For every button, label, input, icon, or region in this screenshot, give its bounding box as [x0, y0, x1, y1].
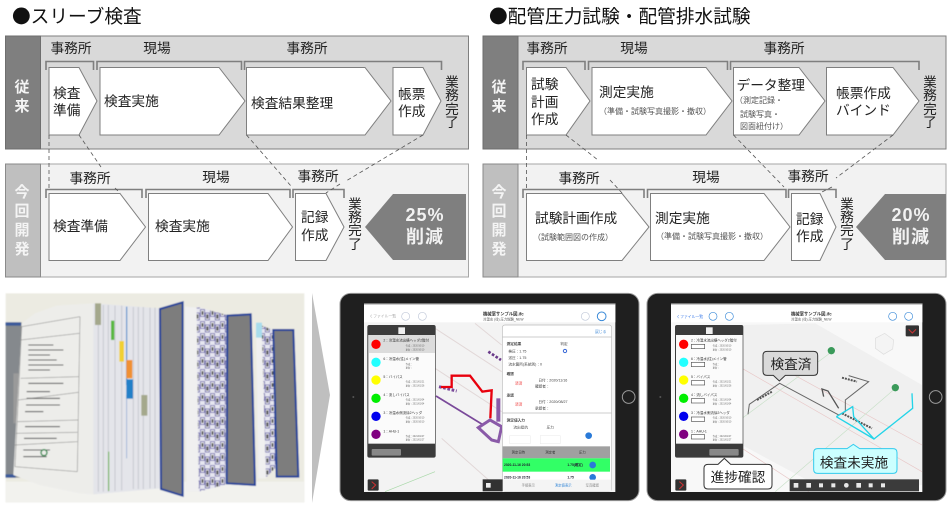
step: 検査結果整理: 検査結果整理: [251, 96, 333, 111]
row label: 今回開発: 回: [491, 203, 507, 220]
location brackets: 現場: [143, 41, 171, 56]
measurement detail panel: 確認者：: [535, 384, 550, 389]
location brackets: [46, 169, 344, 198]
system list panel: [367, 325, 436, 458]
system list panel: 作成：2020/10/10: [406, 344, 425, 348]
system list panel: 更新：2020/10/10: [406, 347, 425, 351]
measurement detail panel: 承認者：: [535, 405, 550, 410]
measurement detail panel: 測定値入力: [507, 418, 525, 423]
reduction arrow: 25%削減: [365, 194, 466, 260]
heading: スリーブ検査: ●スリーブ検査: [12, 2, 142, 29]
end label: 業務完了: 務: [445, 88, 459, 103]
system list panel: 更新：2021/01/27: [406, 438, 425, 442]
system list panel: 更新：2021/01/26: [406, 383, 425, 387]
measurement detail panel: 検圧：1.75: [508, 348, 526, 353]
system list panel: 6：冷温水(往)メイン管: [691, 356, 727, 361]
system list panel: 1：AHU-1: [691, 429, 707, 433]
system list panel: 更新：2021/01/27: [713, 438, 732, 442]
measurement detail panel: 1.75: [567, 476, 574, 480]
measurement detail panel: 圧力: [579, 450, 586, 455]
system list panel: 更新：: [713, 365, 720, 369]
step: 検査実施: [148, 194, 292, 260]
measurement detail panel: 2020-11-16 20:53: [504, 476, 530, 480]
measurement detail panel: [502, 325, 612, 492]
photo: paper inspection binders: [6, 293, 304, 502]
callout: 検査未実施: [814, 444, 897, 473]
system list panel: 2：冷温水流出横ヘッダ2階付: [383, 338, 430, 343]
step: 帳票作成バインド: 帳票作成: [836, 86, 891, 101]
panel: スリーブ検査 従来: [6, 36, 468, 149]
step: 検査実施: 検査実施: [104, 94, 159, 109]
screen contents: [364, 303, 615, 492]
step: データ整理: データ整理: [736, 77, 805, 93]
location brackets: 現場: [202, 170, 230, 185]
row label: 今回開発: 今: [14, 183, 30, 201]
reduction arrow: 20%削減: 削減: [892, 226, 930, 247]
arrow: before to after: [312, 293, 330, 503]
measurement detail panel: 日付：2020/11/16: [538, 378, 567, 383]
location brackets: 現場: [620, 41, 648, 56]
step: 検査準備: 準備: [53, 103, 81, 118]
top navigation bar: 冷温水 (往) 圧力試験_NEW: [483, 317, 524, 322]
system list panel: 作成：2020/10/10: [713, 416, 732, 420]
system list panel: 作成：2020/10/10: [713, 344, 732, 348]
row label: 従来: 来: [14, 98, 30, 115]
step: 測定実施: （準備・試験写真撮影・撤収）: [599, 106, 711, 116]
end label: 業務完了: 完: [923, 102, 937, 117]
step mapping dashed lines: left: [49, 135, 423, 193]
step: データ整理: 図面紐付け）: [740, 121, 788, 131]
measurement detail panel: 圧力: [547, 424, 554, 429]
step: 試験計画作成: 計画: [531, 95, 558, 110]
system list panel: 更新：: [406, 365, 413, 369]
step: 検査準備: [49, 68, 97, 135]
step: データ整理: [734, 68, 825, 135]
callout: 検査未実施: 検査未実施: [820, 455, 888, 470]
system list panel: 作成：2021/01/04: [713, 398, 732, 402]
row label: 従来: 来: [491, 98, 507, 115]
location brackets: 事務所: [69, 171, 111, 186]
end label: 業務完了: 業: [445, 75, 459, 90]
system list panel: 作成：2021/01/04: [406, 398, 425, 402]
measurement detail panel: 流水箇所(系統別)：0: [508, 362, 542, 367]
tablet: progress screen: [647, 293, 946, 501]
step: 記録作成: [296, 194, 344, 260]
end label: 業務完了: 了: [923, 115, 937, 130]
top navigation bar: 機械室サンプル図.ifc: [791, 311, 832, 318]
measurement detail panel: 手順表示: [522, 483, 536, 488]
end label: 業務完了: 務: [348, 210, 362, 225]
step: 試験計画作成: 試験: [531, 77, 559, 92]
location brackets: 事務所: [50, 41, 92, 56]
measurement detail panel: 流出抵抗: [513, 424, 528, 429]
system list panel: 作成：: [406, 362, 413, 366]
location brackets: 事務所: [558, 171, 600, 186]
heading: 配管圧力試験・配管排水試験: ●配管圧力試験・配管排水試験: [489, 2, 751, 29]
callout: 進捗確認: 進捗確認: [711, 470, 766, 485]
system list panel: 更新：2021/01/04: [713, 401, 732, 405]
location brackets: 事務所: [787, 169, 829, 184]
step: 記録作成: 記録: [301, 210, 329, 225]
system list panel: 作成：2021/01/21: [406, 380, 425, 384]
callout: 進捗確認: [704, 458, 772, 489]
row label: 今回開発: 開: [491, 222, 507, 239]
step: 測定実施: [592, 68, 732, 135]
end label: 業務完了: 業: [923, 75, 937, 90]
measurement detail panel: 済済: [515, 402, 523, 407]
step: データ整理: 試験写真・: [740, 109, 780, 119]
step: 帳票作成: [393, 68, 441, 135]
system list panel: 1：AHU-1: [383, 429, 399, 433]
step: 記録作成: 作成: [796, 229, 824, 244]
measurement detail panel: 測定日時: [512, 450, 526, 455]
system list panel: 更新：2021/01/04: [406, 401, 425, 405]
measurement detail panel: 確認: [507, 371, 514, 376]
step: 検査準備: [49, 194, 146, 260]
step: 帳票作成: 帳票: [398, 87, 425, 102]
reduction arrow: 20%削減: 20%: [891, 205, 931, 225]
tablet: measurement screen: [340, 293, 639, 501]
step: 検査実施: [100, 68, 245, 135]
system list panel: 作成：: [713, 362, 720, 366]
step: 帳票作成バインド: [826, 68, 919, 135]
measurement detail panel: 1.75(確定): [567, 462, 583, 467]
step: 帳票作成バインド: バインド: [836, 103, 891, 118]
panel: 配管試験 今回開発: [483, 164, 946, 277]
step: 検査準備: 検査準備: [53, 219, 108, 234]
3D piping background: [385, 323, 502, 492]
system list panel: 作成：2020/10/10: [406, 416, 425, 420]
measurement detail panel: 済済: [515, 380, 523, 385]
step: 記録作成: [792, 194, 836, 260]
system list panel: 更新：2021/01/26: [713, 383, 732, 387]
system list panel: 4：流しバイパス: [691, 392, 718, 397]
step: 試験計画作成: 試験計画作成: [535, 211, 617, 226]
row label: 従来: 従: [491, 79, 507, 96]
step: 試験計画作成: [526, 194, 649, 260]
row label: 今回開発: 今: [491, 183, 507, 201]
end label: 業務完了: 了: [348, 237, 362, 252]
side toggle and toolbar: [368, 479, 503, 491]
measurement detail panel: 承認: [507, 392, 514, 397]
top navigation bar: くファイル一覧: [676, 314, 703, 319]
location brackets: 事務所: [286, 41, 328, 56]
step: 試験計画作成: 作成: [531, 112, 559, 127]
measurement detail panel: 測定者: [545, 450, 556, 455]
system list panel: 作成：2021/01/27: [713, 434, 732, 438]
system list panel: 更新：2020/10/10: [713, 347, 732, 351]
step: 検査結果整理: [246, 68, 391, 135]
system list panel: 3：冷温水側流徐2ヘッダ: [691, 410, 730, 415]
top navigation bar: 冷温水 (往) 圧力試験_NEW: [791, 317, 832, 322]
system list panel: 4：流しバイパス: [383, 392, 410, 397]
step: 記録作成: 記録: [796, 212, 824, 227]
system list panel: [675, 325, 743, 458]
row label: 今回開発: 発: [491, 240, 507, 258]
row label: 今回開発: 回: [14, 203, 30, 220]
step: 測定実施: （準備・試験写真撮影・撤収）: [656, 231, 768, 241]
system list panel: 更新：2020/10/10: [406, 419, 425, 423]
end label: 業務完了: 完: [840, 223, 854, 238]
reduction arrow: 25%削減: 25%: [405, 205, 445, 225]
reduction arrow: 20%削減: [856, 194, 946, 260]
measurement detail panel: 送圧：1.75: [508, 355, 526, 360]
screen contents: [671, 303, 922, 492]
end label: 業務完了: 業: [840, 197, 854, 212]
callout: 検査済: [763, 351, 818, 381]
measurement detail panel: 測定値表示: [555, 483, 572, 488]
end label: 業務完了: 了: [840, 237, 854, 252]
reduction arrow: 25%削減: 削減: [406, 226, 444, 247]
top navigation bar: 機械室サンプル図.ifc: [483, 311, 524, 318]
system list panel: 3：冷温水側流徐2ヘッダ: [383, 410, 423, 415]
end label: 業務完了: 完: [348, 223, 362, 238]
step: 記録作成: 作成: [301, 228, 329, 243]
location brackets: [46, 41, 442, 70]
step: 検査準備: 検査: [53, 86, 81, 101]
location brackets: [523, 41, 919, 70]
location brackets: 現場: [692, 170, 720, 185]
step: 検査実施: 検査実施: [155, 219, 210, 234]
row label: 今回開発: 開: [14, 222, 30, 239]
end label: 業務完了: 業: [348, 197, 362, 212]
location brackets: [523, 169, 836, 198]
end label: 業務完了: 務: [840, 210, 854, 225]
step mapping dashed lines: right: [526, 135, 893, 193]
measurement detail panel: 写真確認: [586, 483, 600, 488]
system list panel: 2：冷温水流出横ヘッダ2階付: [691, 338, 737, 343]
step: 試験計画作成: （試験範囲図の作成）: [533, 232, 613, 242]
system list panel: 作成：2021/01/21: [713, 380, 732, 384]
measurement detail panel: 判定: [560, 341, 568, 346]
end label: 業務完了: 完: [445, 102, 459, 117]
step: 試験計画作成: [526, 68, 590, 135]
bottom toolbar: [675, 479, 919, 491]
measurement detail panel: 戻じる: [595, 329, 607, 334]
callout: 検査済: 検査済: [771, 357, 812, 372]
system list panel: 6：冷温水(往)メイン管: [383, 356, 419, 361]
row label: 従来: 従: [14, 79, 30, 96]
3D piping progress view: [742, 323, 922, 492]
measurement detail panel: 測定結果: [507, 341, 522, 346]
step: 測定実施: [650, 194, 790, 260]
measurement detail panel: 2020-11-16 20:53: [504, 463, 530, 467]
measurement detail panel: 日付：2020/08/27: [538, 399, 568, 404]
panel: 配管試験 従来: [483, 36, 946, 149]
panel: スリーブ検査 今回開発: [6, 164, 468, 277]
top navigation bar: くファイル一覧: [369, 314, 396, 319]
location brackets: 事務所: [763, 41, 805, 56]
system list panel: 作成：2021/01/27: [406, 434, 425, 438]
system list panel: 5：バイパス: [383, 374, 403, 379]
step: 測定実施: 測定実施: [655, 211, 710, 226]
step: 帳票作成: 作成: [398, 104, 426, 119]
end label: 業務完了: 務: [923, 88, 937, 103]
row label: 今回開発: 発: [14, 240, 30, 258]
system list panel: 5：バイパス: [691, 374, 711, 379]
top navigation bar: [671, 303, 922, 336]
location brackets: 事務所: [526, 41, 568, 56]
end label: 業務完了: 了: [445, 115, 459, 130]
system list panel: 更新：2020/10/10: [713, 419, 732, 423]
top navigation bar: [364, 303, 615, 322]
location brackets: 事務所: [297, 169, 339, 184]
step: 測定実施: 測定実施: [599, 85, 654, 100]
step: データ整理: （測定記録・: [735, 95, 783, 105]
